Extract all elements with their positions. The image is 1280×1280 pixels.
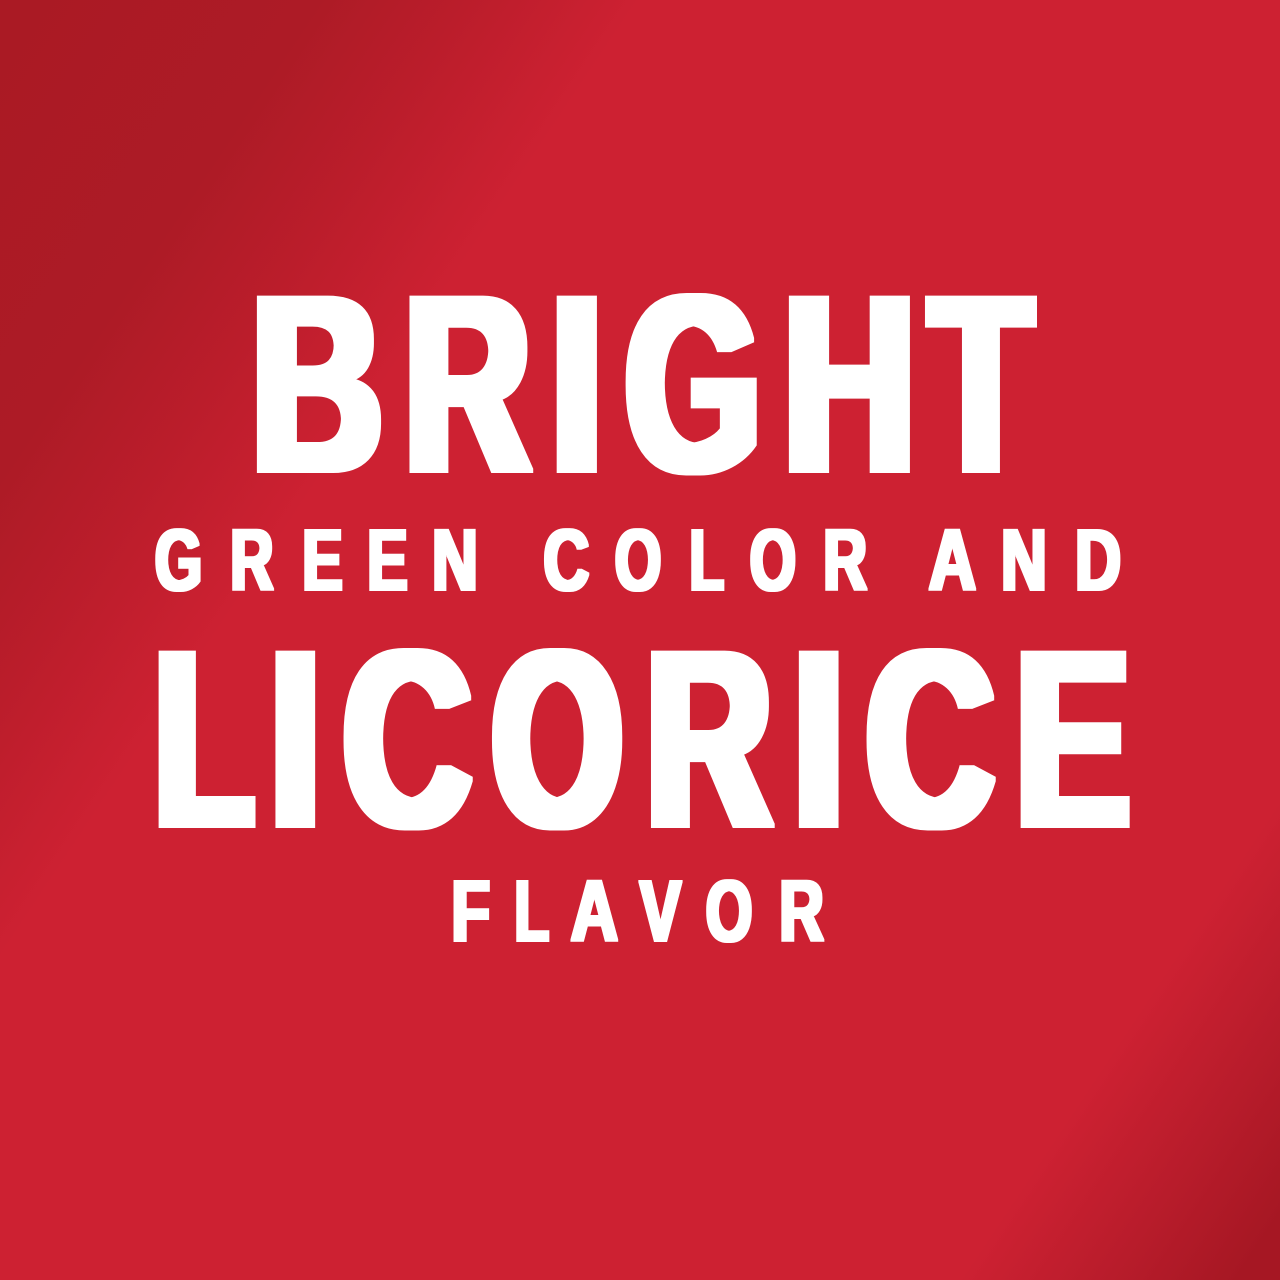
subheading: GREEN COLOR AND: L xyxy=(690,512,724,609)
subheading: GREEN COLOR AND: O xyxy=(750,512,796,609)
heading: LICORICE: R xyxy=(646,599,771,880)
subheading: GREEN COLOR AND: C xyxy=(543,512,589,609)
subheading: GREEN COLOR AND: O xyxy=(615,512,661,609)
subheading: GREEN COLOR AND: A xyxy=(929,512,976,609)
heading: LICORICE: C xyxy=(343,599,471,880)
heading: BRIGHT: G xyxy=(626,244,760,525)
heading: BRIGHT: H xyxy=(784,244,915,525)
heading: BRIGHT: I xyxy=(552,244,602,525)
heading: LICORICE: O xyxy=(492,599,622,880)
subheading: GREEN COLOR AND: N xyxy=(1001,512,1047,609)
subheading: GREEN COLOR AND: G xyxy=(155,512,202,609)
heading: LICORICE: E xyxy=(1016,599,1129,880)
subheading: GREEN COLOR AND: R xyxy=(230,512,274,609)
heading: BRIGHT: T xyxy=(930,244,1032,525)
subheading: FLAVOR: L xyxy=(514,863,549,960)
subheading: GREEN COLOR AND: R xyxy=(823,512,867,609)
subheading: GREEN COLOR AND: E xyxy=(302,512,343,609)
heading: BRIGHT: R xyxy=(405,244,530,525)
subheading: FLAVOR: A xyxy=(571,863,618,960)
heading: LICORICE: I xyxy=(270,599,320,880)
subheading: FLAVOR: V xyxy=(640,863,681,960)
heading: BRIGHT: B xyxy=(252,244,382,525)
heading: LICORICE: C xyxy=(866,599,994,880)
heading: LICORICE: I xyxy=(794,599,844,880)
heading: LICORICE: L xyxy=(155,599,254,880)
subheading: GREEN COLOR AND: N xyxy=(432,512,478,609)
subheading: FLAVOR: R xyxy=(779,863,824,960)
subheading: FLAVOR: F xyxy=(451,863,490,960)
subheading: GREEN COLOR AND: E xyxy=(367,512,408,609)
subheading: FLAVOR: O xyxy=(706,863,752,960)
subheading: GREEN COLOR AND: D xyxy=(1075,512,1121,609)
